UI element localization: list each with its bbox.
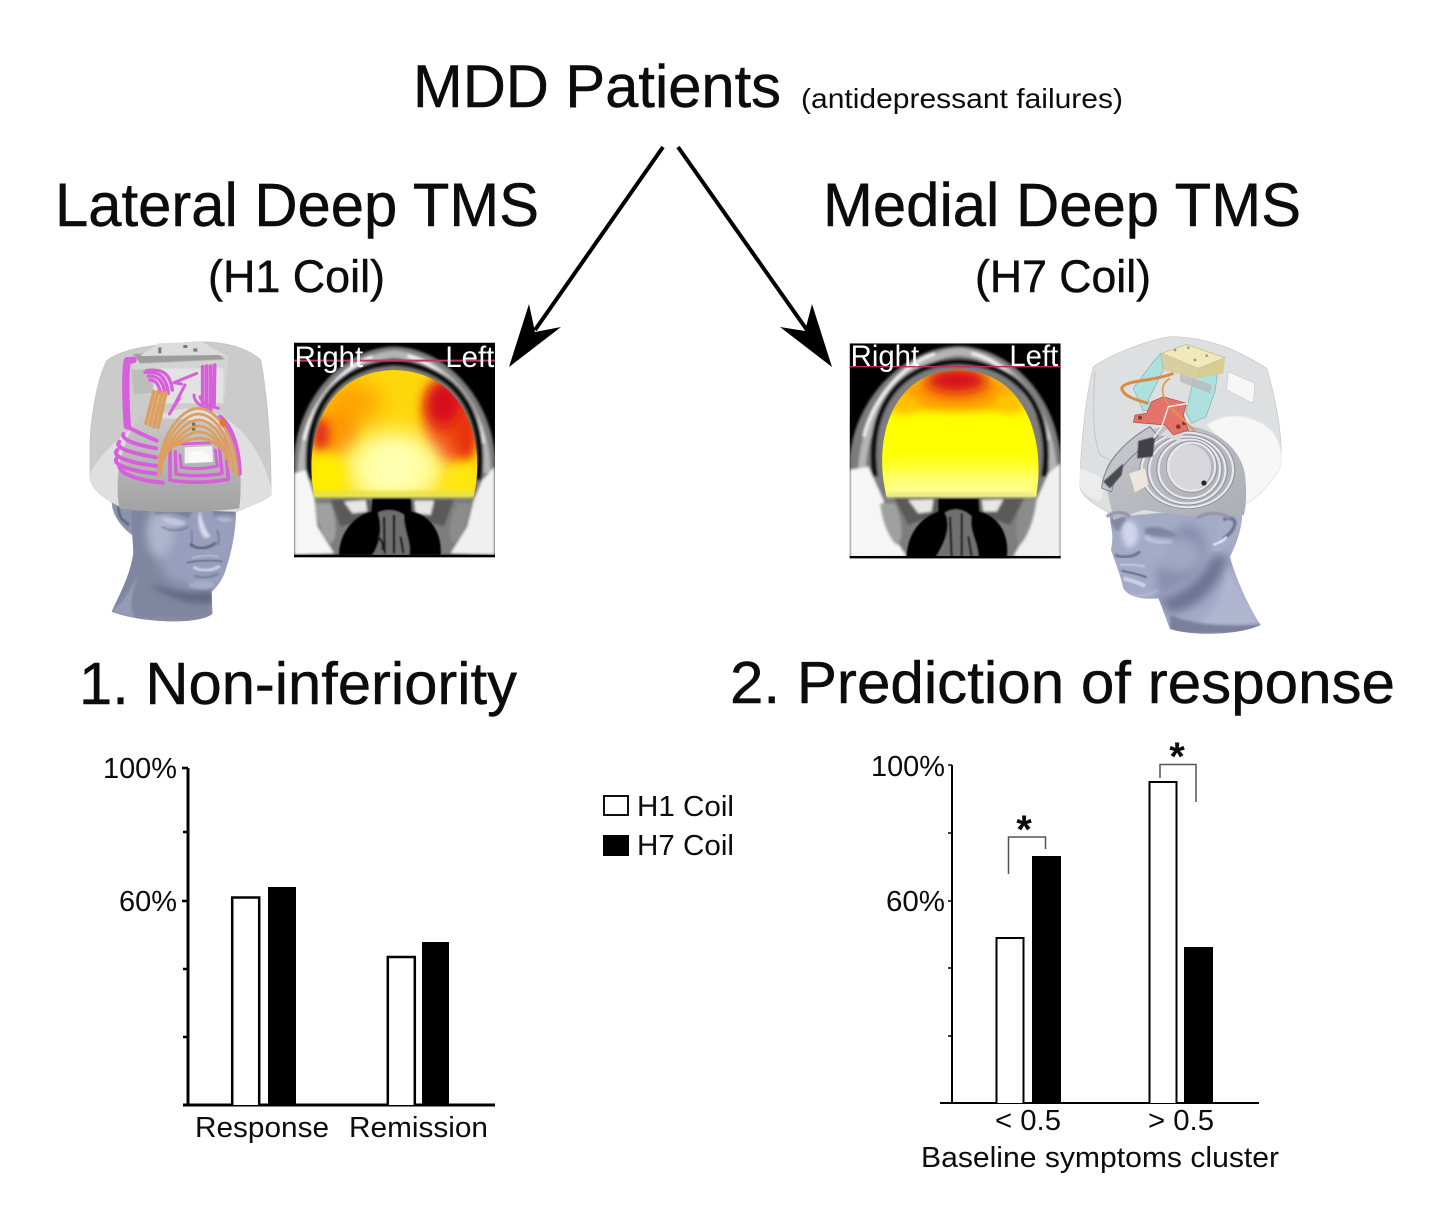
icon: head with H1 coil — [90, 342, 271, 623]
significance bracket: above 0.5: * — [1169, 735, 1185, 779]
x-axis labels: > 0.5 — [1148, 1105, 1214, 1137]
heading: medial deep TMS — [823, 171, 1301, 302]
legend — [603, 791, 734, 862]
title: (antidepressant failures) — [801, 83, 1123, 114]
bars: below 0.5 — [996, 856, 1061, 1103]
heading: lateral deep TMS: (H1 Coil) — [208, 251, 385, 302]
bars: remission — [388, 942, 449, 1105]
brain scan: lateral activation map: Right — [295, 341, 363, 374]
brain scan: medial activation map: Left — [1009, 340, 1058, 373]
title: MDD Patients — [413, 53, 781, 120]
x-axis labels — [921, 1105, 1279, 1174]
heading: medial deep TMS: Medial Deep TMS — [823, 171, 1301, 239]
arrow: to lateral deep TMS — [509, 147, 663, 367]
y-axis labels: 60% — [119, 886, 177, 918]
significance bracket: below 0.5 — [1008, 808, 1046, 874]
heading: lateral deep TMS — [55, 171, 539, 302]
significance bracket: below 0.5: * — [1016, 808, 1032, 852]
heading: lateral deep TMS: Lateral Deep TMS — [55, 171, 539, 239]
icon: head with H7 coil — [1080, 337, 1282, 634]
brain scan: lateral activation map: Left — [445, 341, 494, 374]
brain scan: medial activation map — [850, 340, 1061, 558]
x-axis labels: Remission — [349, 1112, 488, 1144]
x-axis labels: < 0.5 — [995, 1105, 1061, 1137]
y-axis labels: 60% — [886, 886, 945, 918]
arrow: to medial deep TMS — [678, 147, 832, 367]
x-axis labels: Baseline symptoms cluster — [921, 1142, 1279, 1174]
x-axis labels: Response — [195, 1112, 329, 1144]
x-axis labels — [195, 1112, 488, 1144]
legend: H1 Coil — [637, 791, 734, 823]
significance bracket: above 0.5 — [1160, 735, 1196, 802]
legend: H7 Coil — [637, 830, 734, 862]
brain scan: lateral activation map — [294, 341, 495, 557]
heading: medial deep TMS: (H7 Coil) — [975, 251, 1151, 302]
heading: prediction of response: 2. Prediction of response — [730, 649, 1395, 716]
bar chart: non-inferiority — [103, 753, 495, 1144]
bars: above 0.5 — [1150, 782, 1213, 1103]
heading: non-inferiority: 1. Non-inferiority — [79, 650, 517, 717]
y-axis labels: 100% — [871, 751, 945, 783]
bar chart: prediction of response — [871, 735, 1279, 1174]
title — [413, 53, 1123, 120]
y-axis labels: 100% — [103, 753, 177, 785]
bars: response — [232, 887, 296, 1105]
y-axis labels — [871, 751, 945, 918]
y-axis labels — [103, 753, 177, 918]
brain scan: medial activation map: Right — [851, 340, 919, 373]
